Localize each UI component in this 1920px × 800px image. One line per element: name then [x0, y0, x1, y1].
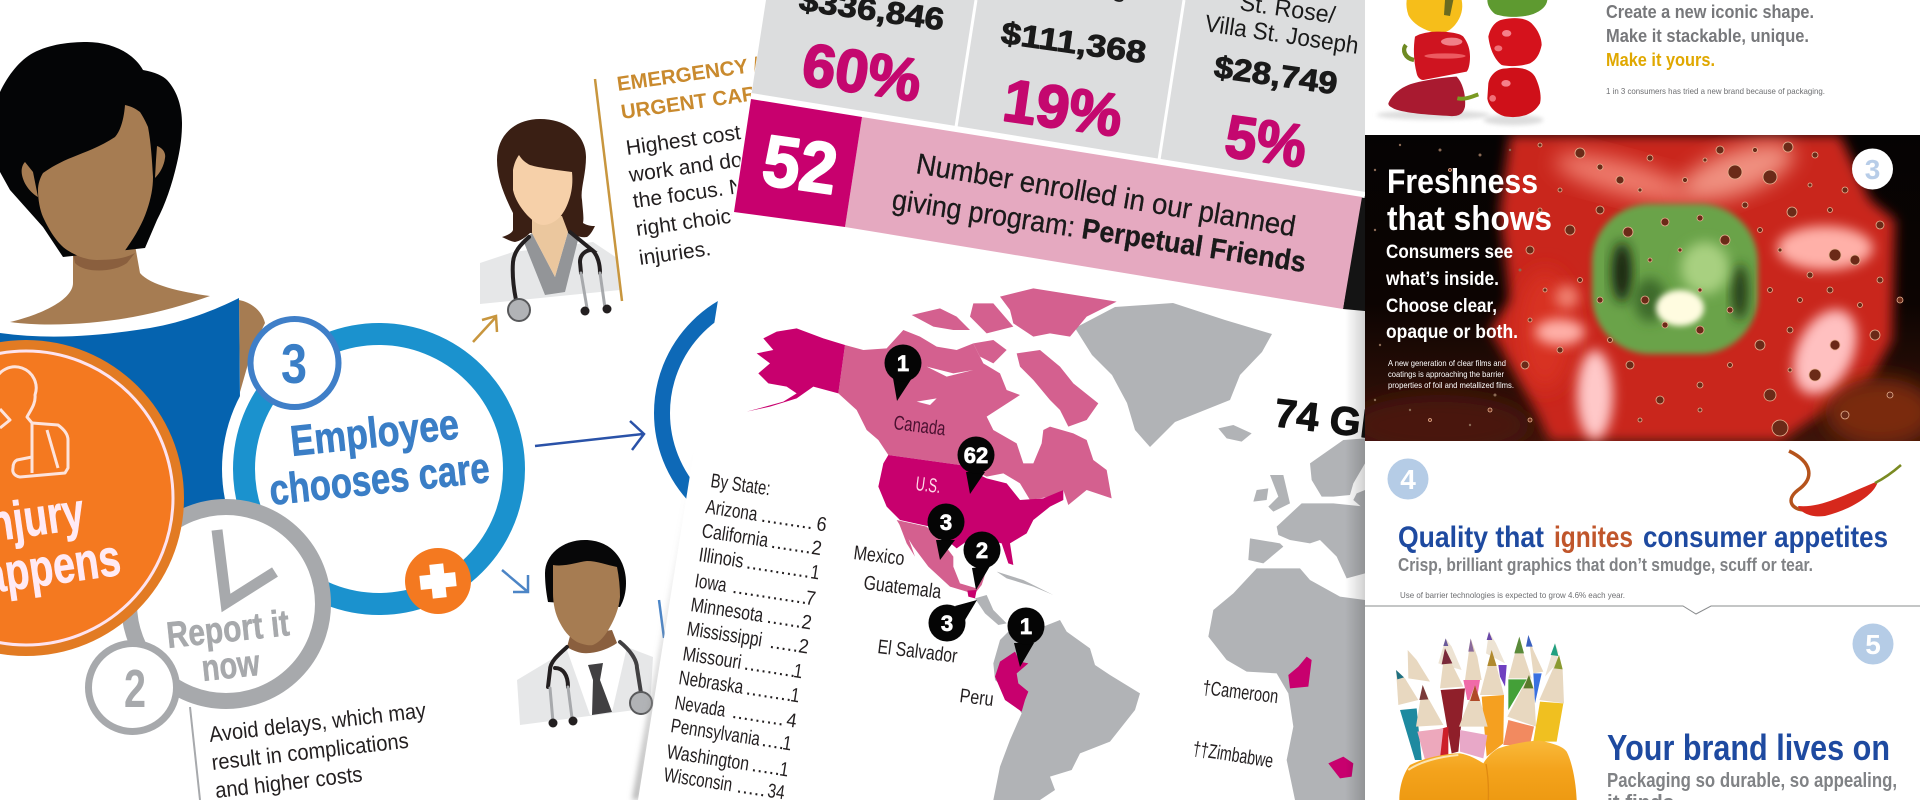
text block: highest cost: injuries. — [637, 237, 712, 270]
heading: report it now: Report it — [165, 602, 291, 656]
list: by state: ......... — [743, 653, 798, 682]
badge: section 3: 3 — [1865, 154, 1880, 185]
text block: avoid delays — [208, 697, 427, 800]
arrow: to next step — [535, 421, 644, 450]
badge: section 3 — [1852, 148, 1893, 190]
map pins: 62 — [964, 443, 988, 468]
arrow: to emergency — [473, 316, 497, 342]
map pins — [884, 344, 1044, 667]
illustration: female doctor — [480, 119, 620, 321]
country labels: Guatemala — [862, 572, 943, 604]
text block: avoid delays: Avoid delays, which may — [208, 697, 427, 747]
text block: consumers see: opaque or both. — [1386, 322, 1518, 343]
panel: annual report — [638, 0, 1500, 800]
circle: next step ring — [654, 301, 718, 499]
list: by state: Washington — [665, 741, 751, 775]
badge: step 3 — [250, 319, 338, 407]
list: by state: Iowa — [693, 570, 729, 597]
list: by state: 2 — [800, 611, 813, 634]
badge: section 5 — [1852, 624, 1894, 664]
heading: emergency urgent care: URGENT CARE — [619, 80, 772, 124]
badge: section 5: 5 — [1865, 629, 1881, 660]
note: clear films: A new generation of clear films and — [1388, 358, 1506, 368]
badge: step 2: 2 — [124, 659, 146, 719]
heading: freshness that shows: Freshness — [1387, 163, 1538, 201]
heading: employee chooses care: chooses care — [267, 444, 492, 515]
map: greenland — [1075, 303, 1272, 447]
stat: 5 percent: Villa St. Joseph — [1203, 10, 1360, 60]
page background — [638, 0, 1365, 800]
text block: highest cost: right choice — [634, 203, 744, 241]
country labels: Peru — [958, 685, 995, 711]
text block: avoid delays: result in complications — [210, 728, 410, 775]
list: by state: Missouri — [681, 643, 743, 674]
text: number enrolled: Number enrolled in our planned — [914, 148, 1298, 243]
photo: stacked peppers — [1377, 0, 1547, 125]
list: by state: 4 — [785, 709, 798, 733]
photo: chili pepper — [1789, 451, 1901, 516]
country labels: ††Zimbabwe — [1191, 738, 1275, 773]
text block: consumers see — [1385, 242, 1518, 343]
list: by state: ....... — [769, 531, 813, 559]
note: clear films: properties of foil and metallized films. — [1388, 380, 1514, 390]
note: clear films — [1388, 358, 1514, 390]
icon: stethoscope — [548, 642, 641, 722]
panel edge shadow — [632, 430, 700, 800]
heading: freshness that shows — [1387, 163, 1552, 238]
list: by state: 1 — [792, 660, 804, 683]
banner: planned giving — [734, 96, 1365, 309]
list: by state: 1 — [781, 732, 793, 755]
map: south america, europe, africa — [993, 425, 1365, 800]
list: by state: By State: — [709, 470, 772, 500]
illustration: woman — [0, 42, 265, 520]
text block: consumers see: what’s inside. — [1385, 269, 1499, 290]
list: by state: 2 — [797, 635, 810, 659]
list: by state: Arizona — [704, 496, 760, 526]
heading: report it now: now — [200, 642, 262, 689]
map: world geography — [662, 288, 1500, 800]
arrow: lower branch — [659, 600, 664, 638]
badge: section 4: 4 — [1400, 464, 1416, 495]
heading: quality that ignites — [1398, 521, 1888, 554]
text block: iconic shape: Create a new iconic shape. — [1606, 2, 1814, 22]
droplets — [1428, 142, 1903, 436]
stat: 60 percent — [797, 0, 946, 114]
list: by state: ......... — [760, 505, 815, 534]
country labels: Mexico — [852, 542, 906, 570]
list: by state: Nevada — [673, 692, 728, 722]
circle: report it now ring — [129, 507, 323, 701]
heading: emergency urgent care — [615, 53, 772, 124]
list: by state: Minnesota — [689, 594, 765, 627]
callout rule — [595, 79, 622, 301]
heading: quality that ignites: Quality that — [1398, 521, 1544, 554]
list: by state: Pennsylvania — [669, 715, 762, 751]
list: by state: .... — [760, 729, 787, 754]
text block: iconic shape: Make it yours. — [1606, 50, 1715, 70]
list: by state: ..... — [750, 754, 783, 780]
stat box: 52 — [734, 99, 862, 227]
map pins: 1 — [1020, 614, 1032, 639]
text: number enrolled — [890, 148, 1308, 279]
list: by state: Nebraska — [677, 667, 745, 699]
heading: quality that ignites: ignites — [1554, 521, 1633, 554]
text block: highest cost: the focus. N — [631, 175, 746, 213]
heading: emergency urgent care: EMERGENCY / — [615, 53, 761, 96]
heading: report it now — [165, 602, 291, 689]
text: injury happens — [0, 483, 124, 609]
icon: medical plus — [405, 548, 471, 614]
list: by state: ......... — [731, 701, 786, 731]
subheading: crisp graphics: Crisp, brilliant graphics that don’t smudge, scuff or tear. — [1398, 554, 1813, 575]
heading: employee chooses care: Employee — [288, 401, 461, 466]
photo: pepper with droplets — [1350, 131, 1920, 455]
list: by state: Wisconsin — [662, 764, 734, 796]
text block: iconic shape — [1606, 2, 1814, 70]
heading: freshness that shows: that shows — [1387, 200, 1552, 238]
badge: step 3: 3 — [281, 332, 307, 395]
text block: highest cost — [624, 121, 746, 270]
text block: highest cost: Highest cost — [624, 121, 742, 160]
list: by state: 1 — [809, 561, 821, 584]
country labels: †Cameroon — [1201, 677, 1280, 708]
stat: 19 percent — [999, 0, 1148, 149]
dark block behind band — [1343, 196, 1365, 311]
list: by state: ............. — [731, 576, 809, 609]
list: by state: ..... — [768, 631, 801, 657]
badge: step 2 — [88, 644, 176, 732]
list: by state: 1 — [789, 684, 801, 707]
heading: employee chooses care — [267, 401, 492, 515]
country labels: Canada — [892, 412, 947, 440]
heading: quality that ignites: consumer appetites — [1643, 521, 1888, 554]
text block: iconic shape: Make it stackable, unique. — [1606, 26, 1809, 46]
map pins: 1 — [897, 351, 909, 376]
map: north america — [747, 288, 1117, 625]
list: by state: ........... — [745, 551, 812, 583]
icon: stethoscope — [513, 232, 605, 308]
leader line: report it — [190, 707, 200, 800]
arrow: to doctor — [502, 570, 528, 592]
text block: highest cost: work and do — [627, 148, 744, 187]
map pins: 3 — [940, 510, 952, 535]
list: by state: ........ — [744, 677, 794, 706]
map pins: 3 — [941, 611, 953, 636]
panel: injury care flow — [0, 42, 906, 800]
circle: employee chooses care ring — [244, 334, 514, 604]
page fold shadow — [1345, 310, 1365, 800]
country labels: U.S. — [914, 473, 942, 498]
gray stats band — [751, 0, 1365, 197]
note: one in three: 1 in 3 consumers has tried a new brand because of packaging. — [1606, 86, 1825, 96]
text block: consumers see: Consumers see — [1386, 242, 1513, 263]
panel: packaging brochure — [1350, 0, 1920, 800]
list: by state: California — [700, 520, 770, 552]
illustration: male doctor — [517, 540, 653, 728]
text block: consumers see: Choose clear, — [1386, 296, 1497, 317]
circle: injury happens — [0, 340, 184, 656]
page background — [1365, 0, 1920, 800]
country labels: El Salvador — [876, 636, 959, 668]
heading: 74 global: 74 GLOBAL — [1272, 391, 1500, 462]
list: by state: 7 — [804, 587, 817, 610]
stat: 5 percent: 5% — [1221, 103, 1311, 180]
list: by state — [662, 470, 828, 800]
list: by state: 6 — [815, 513, 828, 536]
list: by state: 1 — [778, 758, 790, 782]
stat: 5 percent — [1203, 0, 1360, 180]
text: number enrolled: giving program: Perpetual Friends — [890, 184, 1308, 279]
country labels — [852, 412, 1280, 773]
stat: 60 percent: 60% — [798, 31, 926, 114]
icon: necktie — [588, 663, 612, 715]
stat: 19 percent: 19% — [999, 67, 1126, 149]
icon: person with arm sling — [0, 367, 68, 477]
stat: 5 percent: $28,749 — [1212, 49, 1340, 101]
map pins: 2 — [976, 538, 988, 563]
stat: 19 percent: $111,368 — [999, 15, 1148, 70]
note: barrier technologies: Use of barrier technologies is expected to grow 4.6% each year. — [1400, 590, 1625, 600]
list: by state: ...... — [765, 606, 803, 633]
photo: pencils in pepper — [1396, 632, 1577, 800]
icon: outer white halo — [222, 312, 536, 626]
stat box: 52: 52 — [758, 121, 842, 210]
list: by state: Mississippi — [685, 618, 764, 651]
badge: section 4 — [1388, 458, 1428, 500]
list: by state: 2 — [810, 537, 823, 560]
note: clear films: coatings is approaching the barrier — [1388, 369, 1504, 379]
icon: clock hands — [217, 530, 275, 603]
list: by state: Illinois — [697, 544, 745, 573]
